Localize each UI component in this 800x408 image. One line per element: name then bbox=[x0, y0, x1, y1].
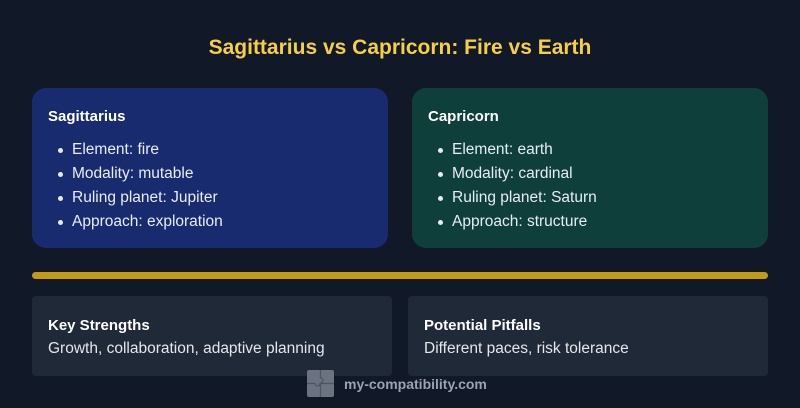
icon: puzzle logo bbox=[307, 370, 334, 397]
panel: Capricorn: Ruling planet: Saturn bbox=[452, 189, 597, 206]
footer brand text: my-compatibility.com bbox=[344, 376, 487, 392]
panel: potential pitfalls bbox=[408, 296, 768, 376]
panel: Capricorn: Modality: cardinal bbox=[452, 165, 573, 182]
panel: potential pitfalls: Different paces, risk tolerance bbox=[424, 340, 629, 357]
panel: Sagittarius: Ruling planet: Jupiter bbox=[72, 189, 218, 206]
panel: Capricorn: Approach: structure bbox=[452, 213, 587, 230]
title: Sagittarius vs Capricorn: Fire vs Earth bbox=[209, 36, 591, 59]
panel: Capricorn: Element: earth bbox=[452, 141, 553, 158]
panel: Capricorn bbox=[412, 88, 768, 248]
panel: Sagittarius: Modality: mutable bbox=[72, 165, 193, 182]
panel: Capricorn: Capricorn bbox=[428, 108, 499, 125]
panel: Sagittarius: Sagittarius bbox=[48, 108, 126, 125]
panel: key strengths: Key Strengths bbox=[48, 317, 150, 334]
panel: key strengths bbox=[32, 296, 392, 376]
panel: Sagittarius: Approach: exploration bbox=[72, 213, 223, 230]
panel: potential pitfalls: Potential Pitfalls bbox=[424, 317, 541, 334]
panel: Sagittarius: Element: fire bbox=[72, 141, 159, 158]
panel: key strengths: Growth, collaboration, adaptive planning bbox=[48, 340, 325, 357]
panel: Sagittarius bbox=[32, 88, 388, 248]
gold divider bar bbox=[32, 272, 768, 279]
